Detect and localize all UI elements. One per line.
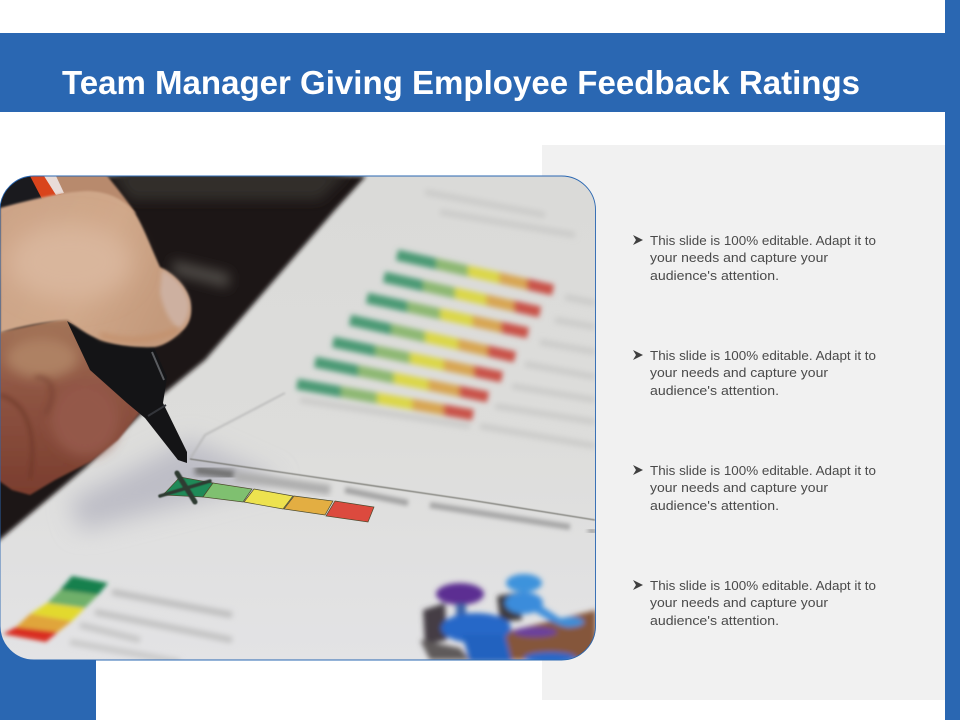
desk background	[0, 170, 366, 548]
bullet 4	[633, 578, 876, 628]
bullet 2: This slide is 100% editable. Adapt it to	[650, 348, 876, 363]
paper shading	[70, 393, 595, 530]
pen cross mark	[160, 473, 210, 502]
header banner	[0, 33, 945, 112]
right edge blue bar	[945, 0, 960, 720]
pen body	[67, 321, 187, 463]
bullet 1: This slide is 100% editable. Adapt it to	[650, 233, 876, 248]
blurred rating bars	[297, 255, 553, 415]
bullet list	[633, 233, 876, 628]
bullet 1: audience's attention.	[650, 268, 779, 283]
hand: skin behind pen cap	[47, 176, 137, 214]
bullet 3	[633, 463, 876, 513]
bullet 2: your needs and capture your	[650, 365, 829, 380]
photo border	[0, 176, 596, 660]
bullet 4: audience's attention.	[650, 613, 779, 628]
title: Team Manager Giving Employee Feedback Ratings	[62, 64, 860, 101]
blurred text lines on form	[70, 192, 595, 662]
sharp rating bar	[163, 477, 374, 522]
photo: hand rating on feedback form	[0, 170, 596, 664]
bullet 1	[633, 233, 876, 283]
bullet 1: your needs and capture your	[650, 250, 829, 265]
bullet 2	[633, 348, 876, 398]
bullet 4: This slide is 100% editable. Adapt it to	[650, 578, 876, 593]
bullet 2: audience's attention.	[650, 383, 779, 398]
hand: thumb	[0, 191, 191, 347]
panel: text background	[542, 145, 945, 700]
bullet 3: your needs and capture your	[650, 480, 829, 495]
blurred caption beside sharp bar	[195, 470, 596, 532]
pen cap at top	[20, 176, 64, 199]
bullet 3: This slide is 100% editable. Adapt it to	[650, 463, 876, 478]
bullet 3: audience's attention.	[650, 498, 779, 513]
blurred legend scale	[3, 576, 108, 642]
bullet 4: your needs and capture your	[650, 595, 829, 610]
figurines illustration	[420, 574, 596, 664]
hand: lower fingers	[0, 318, 150, 495]
blue accent block	[0, 630, 96, 720]
